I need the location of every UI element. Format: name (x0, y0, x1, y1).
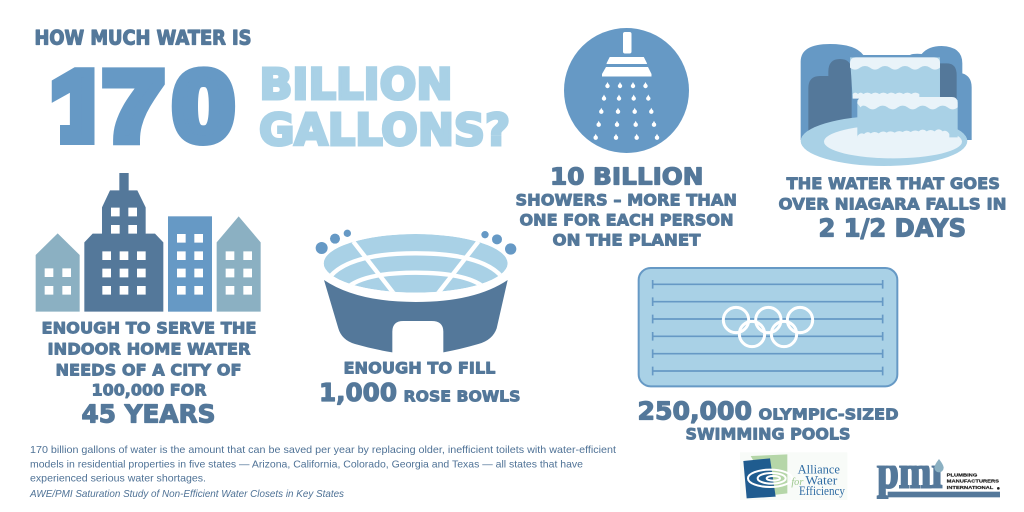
text: 10 billion showers: ONE FOR EACH PERSON (520, 210, 734, 230)
text: olympic pools: SWIMMING POOLS (686, 424, 850, 444)
water droplets (316, 230, 516, 255)
logo: alliance for water efficiency: for (791, 477, 804, 488)
text: 10 billion showers (516, 164, 737, 250)
text block: footnote: AWE/PMI Saturation Study of Non-Efficient Water Closets in Key States (29, 488, 345, 500)
text block: footnote: models in residential properties in five states — Arizona, California, Colorado, Georgia and Texas — all states that have (30, 458, 583, 470)
heading: 170 billion gallons (52, 66, 509, 147)
text: niagara falls: THE WATER THAT GOES (786, 174, 1000, 193)
text: niagara falls (778, 174, 1006, 242)
text: olympic pools: 250,000 (638, 396, 752, 426)
text: rose bowls: ROSE BOWLS (404, 388, 520, 406)
text: 10 billion showers: SHOWERS – MORE THAN (516, 190, 737, 210)
water drop (934, 459, 944, 472)
icon: city buildings (36, 173, 261, 312)
heading: how much water is: HOW MUCH WATER IS (34, 26, 252, 49)
building 3 (168, 216, 212, 312)
big number 170: 70 (103, 52, 234, 162)
stadium body (324, 280, 508, 352)
lane lines (653, 280, 883, 375)
logo: alliance for water efficiency: Efficiency (799, 484, 846, 498)
building 2 (84, 173, 163, 312)
building 1 (36, 233, 80, 312)
icon: shower (564, 28, 689, 153)
logo: alliance for water efficiency (740, 452, 847, 500)
logo: plumbing manufacturers international: pmi (877, 446, 942, 499)
company name: MANUFACTURERS (947, 479, 1000, 485)
text block: footnote: experienced serious water shortages. (30, 472, 206, 484)
word gallons: GALLONS? (259, 105, 510, 156)
text: rose bowls: ENOUGH TO FILL (344, 358, 496, 378)
logo: alliance for water efficiency: Alliance (798, 463, 840, 477)
word billion: BILLION (260, 61, 452, 110)
text: city of 100,000: NEEDS OF A CITY OF (56, 360, 242, 380)
icon: olympic swimming pool (639, 268, 897, 386)
logo: alliance for water efficiency: Water (805, 473, 838, 487)
text: city of 100,000: INDOOR HOME WATER (48, 340, 250, 358)
text: olympic pools: OLYMPIC-SIZED (758, 406, 899, 424)
text block: footnote (29, 444, 616, 500)
text: niagara falls: 2 1/2 DAYS (818, 214, 966, 242)
text: olympic pools (638, 396, 899, 444)
text: 10 billion showers: 10 BILLION (550, 164, 704, 190)
icon: niagara falls (801, 44, 972, 166)
olympic rings (723, 307, 813, 347)
big number 170: 1 (50, 52, 111, 162)
big number 170 (52, 66, 236, 146)
text: rose bowls (319, 358, 520, 407)
text: city of 100,000: 100,000 FOR (92, 380, 206, 400)
text: rose bowls: 1,000 (319, 378, 397, 407)
icon: rose bowl stadium (316, 230, 516, 352)
text: niagara falls: OVER NIAGARA FALLS IN (778, 194, 1006, 214)
logo: plumbing manufacturers international (876, 459, 1000, 499)
company name (947, 472, 1000, 491)
text block: footnote: 170 billion gallons of water is the amount that can be saved per year by replacing older, inefficient toilets with water-efficient (30, 444, 616, 456)
stadium seating (324, 234, 508, 295)
text: city of 100,000 (42, 318, 256, 428)
company name: PLUMBING (947, 472, 977, 478)
text: 10 billion showers: ON THE PLANET (552, 230, 701, 250)
text: city of 100,000: ENOUGH TO SERVE THE (42, 318, 256, 338)
company name: INTERNATIONAL (947, 485, 993, 491)
building 4 (217, 216, 261, 312)
text: city of 100,000: 45 YEARS (82, 400, 216, 428)
